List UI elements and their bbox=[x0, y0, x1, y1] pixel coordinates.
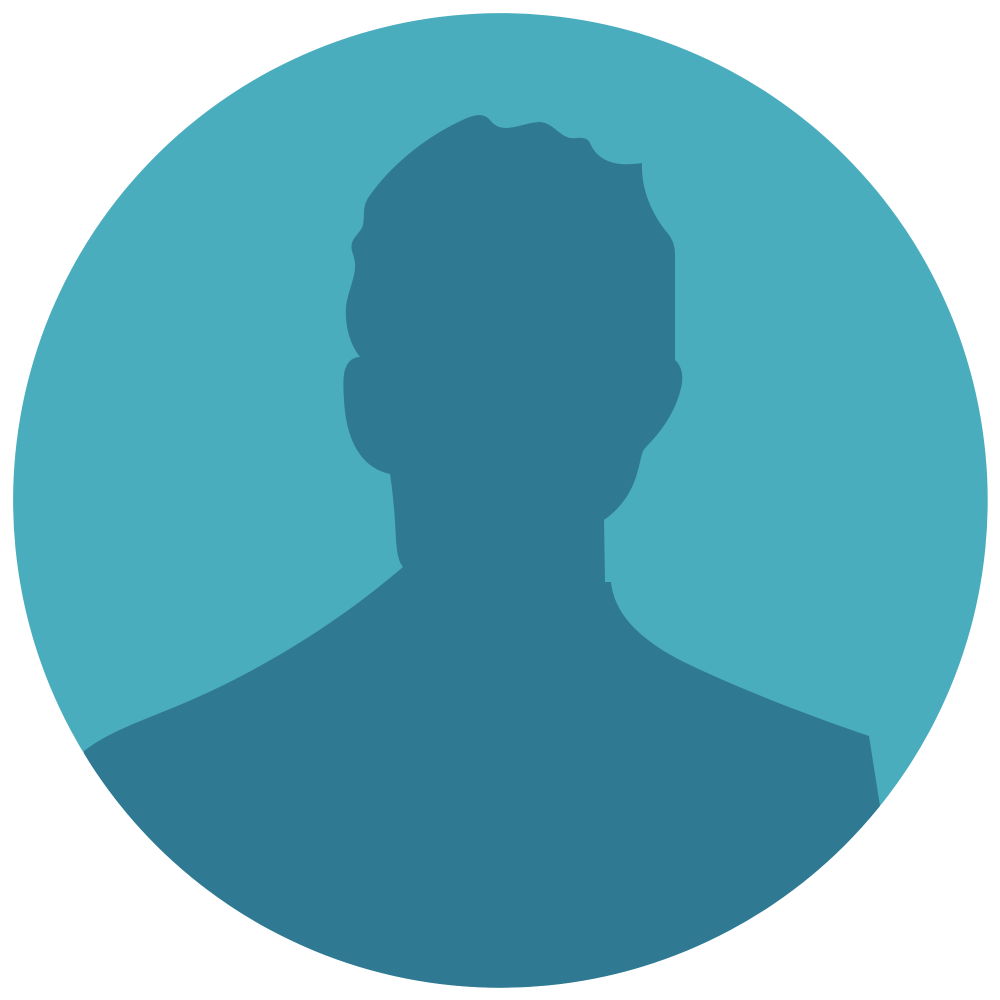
person silhouette bbox=[84, 115, 880, 1000]
